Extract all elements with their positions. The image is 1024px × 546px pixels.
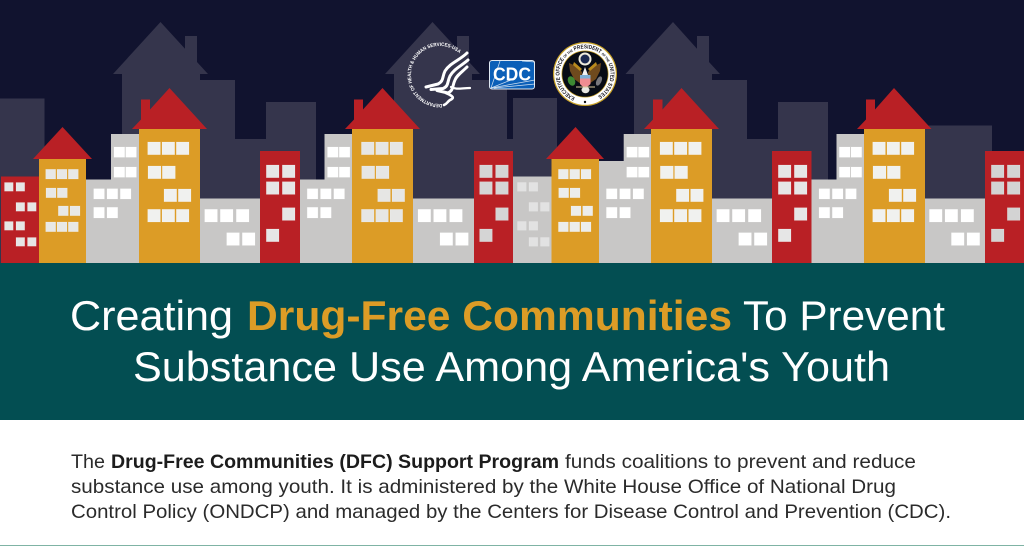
building: gray — [599, 134, 651, 263]
logo: CDC — [490, 60, 535, 89]
building: big yellow with roof — [857, 88, 932, 263]
description text: The — [71, 451, 105, 473]
building: small yellow with roof — [546, 127, 604, 263]
seal crest — [578, 52, 592, 66]
building: red — [260, 151, 300, 263]
windows: small yellow 2 — [558, 169, 593, 232]
building: low gray — [200, 198, 260, 264]
building: small yellow with roof — [33, 127, 92, 263]
building: red — [474, 151, 513, 263]
description text — [71, 451, 951, 523]
building: red — [772, 151, 812, 263]
background silhouette skyline — [0, 22, 992, 264]
windows: red 2 — [480, 165, 508, 242]
building: gray — [86, 134, 139, 263]
foreground buildings — [1, 88, 1024, 264]
title: Drug-Free Communities — [247, 292, 732, 339]
windows: left red — [4, 182, 36, 246]
description text: Drug-Free Communities (DFC) Support Program — [111, 451, 559, 473]
windows: big yellow 3 — [660, 142, 703, 222]
windows: big yellow — [148, 142, 191, 222]
title — [70, 292, 945, 390]
building: big yellow with roof — [644, 88, 719, 263]
windows: low gray 4 — [929, 209, 980, 245]
building: left red — [1, 176, 39, 264]
description text: funds coalitions to prevent and reduce — [565, 451, 916, 473]
building: gray centre — [513, 176, 552, 264]
building: low gray — [712, 198, 772, 264]
seal olive branch — [566, 75, 577, 87]
building: right red — [985, 151, 1024, 263]
description text: substance use among youth. It is administered by the White House Office of National Drug — [71, 476, 896, 498]
logo: HHS eagle seal: DEPARTMENT OF HEALTH & HUMAN SERVICES-USA — [408, 42, 460, 108]
building: low gray — [413, 198, 474, 264]
windows: big yellow 4 — [873, 142, 916, 222]
logo: Executive Office of the President seal: EXECUTIVE OFFICE OF THE PRESIDENT OF THE UNITED STATES — [556, 44, 614, 101]
windows: centre gray — [518, 182, 549, 246]
seal shield — [580, 75, 590, 87]
windows: low gray 2 — [418, 209, 468, 245]
building: gray — [812, 134, 864, 263]
description text: Control Policy (ONDCP) and managed by the Centers for Disease Control and Prevention (CDC). — [71, 501, 951, 523]
windows: gray 2 — [307, 147, 350, 218]
windows: right red — [991, 165, 1020, 242]
title band — [0, 263, 1024, 420]
windows: gray 3 — [606, 147, 649, 218]
windows: low gray 3 — [717, 209, 767, 245]
windows: small yellow — [46, 169, 80, 232]
windows: big yellow 2 — [361, 142, 405, 222]
windows — [4, 142, 1020, 246]
windows: red — [266, 165, 295, 242]
seal eagle wings — [569, 63, 582, 84]
windows: gray 4 — [819, 147, 862, 218]
windows: low gray — [205, 209, 255, 245]
night sky background — [0, 0, 1024, 263]
logo: CDC: CDC — [493, 64, 531, 84]
windows: red 3 — [778, 165, 807, 242]
title: Substance Use Among America's Youth — [133, 343, 890, 390]
seal eagle head — [582, 67, 588, 75]
building: gray — [300, 134, 352, 263]
seal clouds — [582, 87, 590, 93]
building: big yellow with roof — [132, 88, 207, 263]
seal arrows — [595, 75, 603, 87]
building: low gray — [925, 198, 985, 264]
title: To Prevent — [743, 292, 945, 339]
title: Creating — [70, 292, 233, 339]
windows: gray — [94, 147, 136, 218]
building: big yellow with roof — [345, 88, 420, 263]
